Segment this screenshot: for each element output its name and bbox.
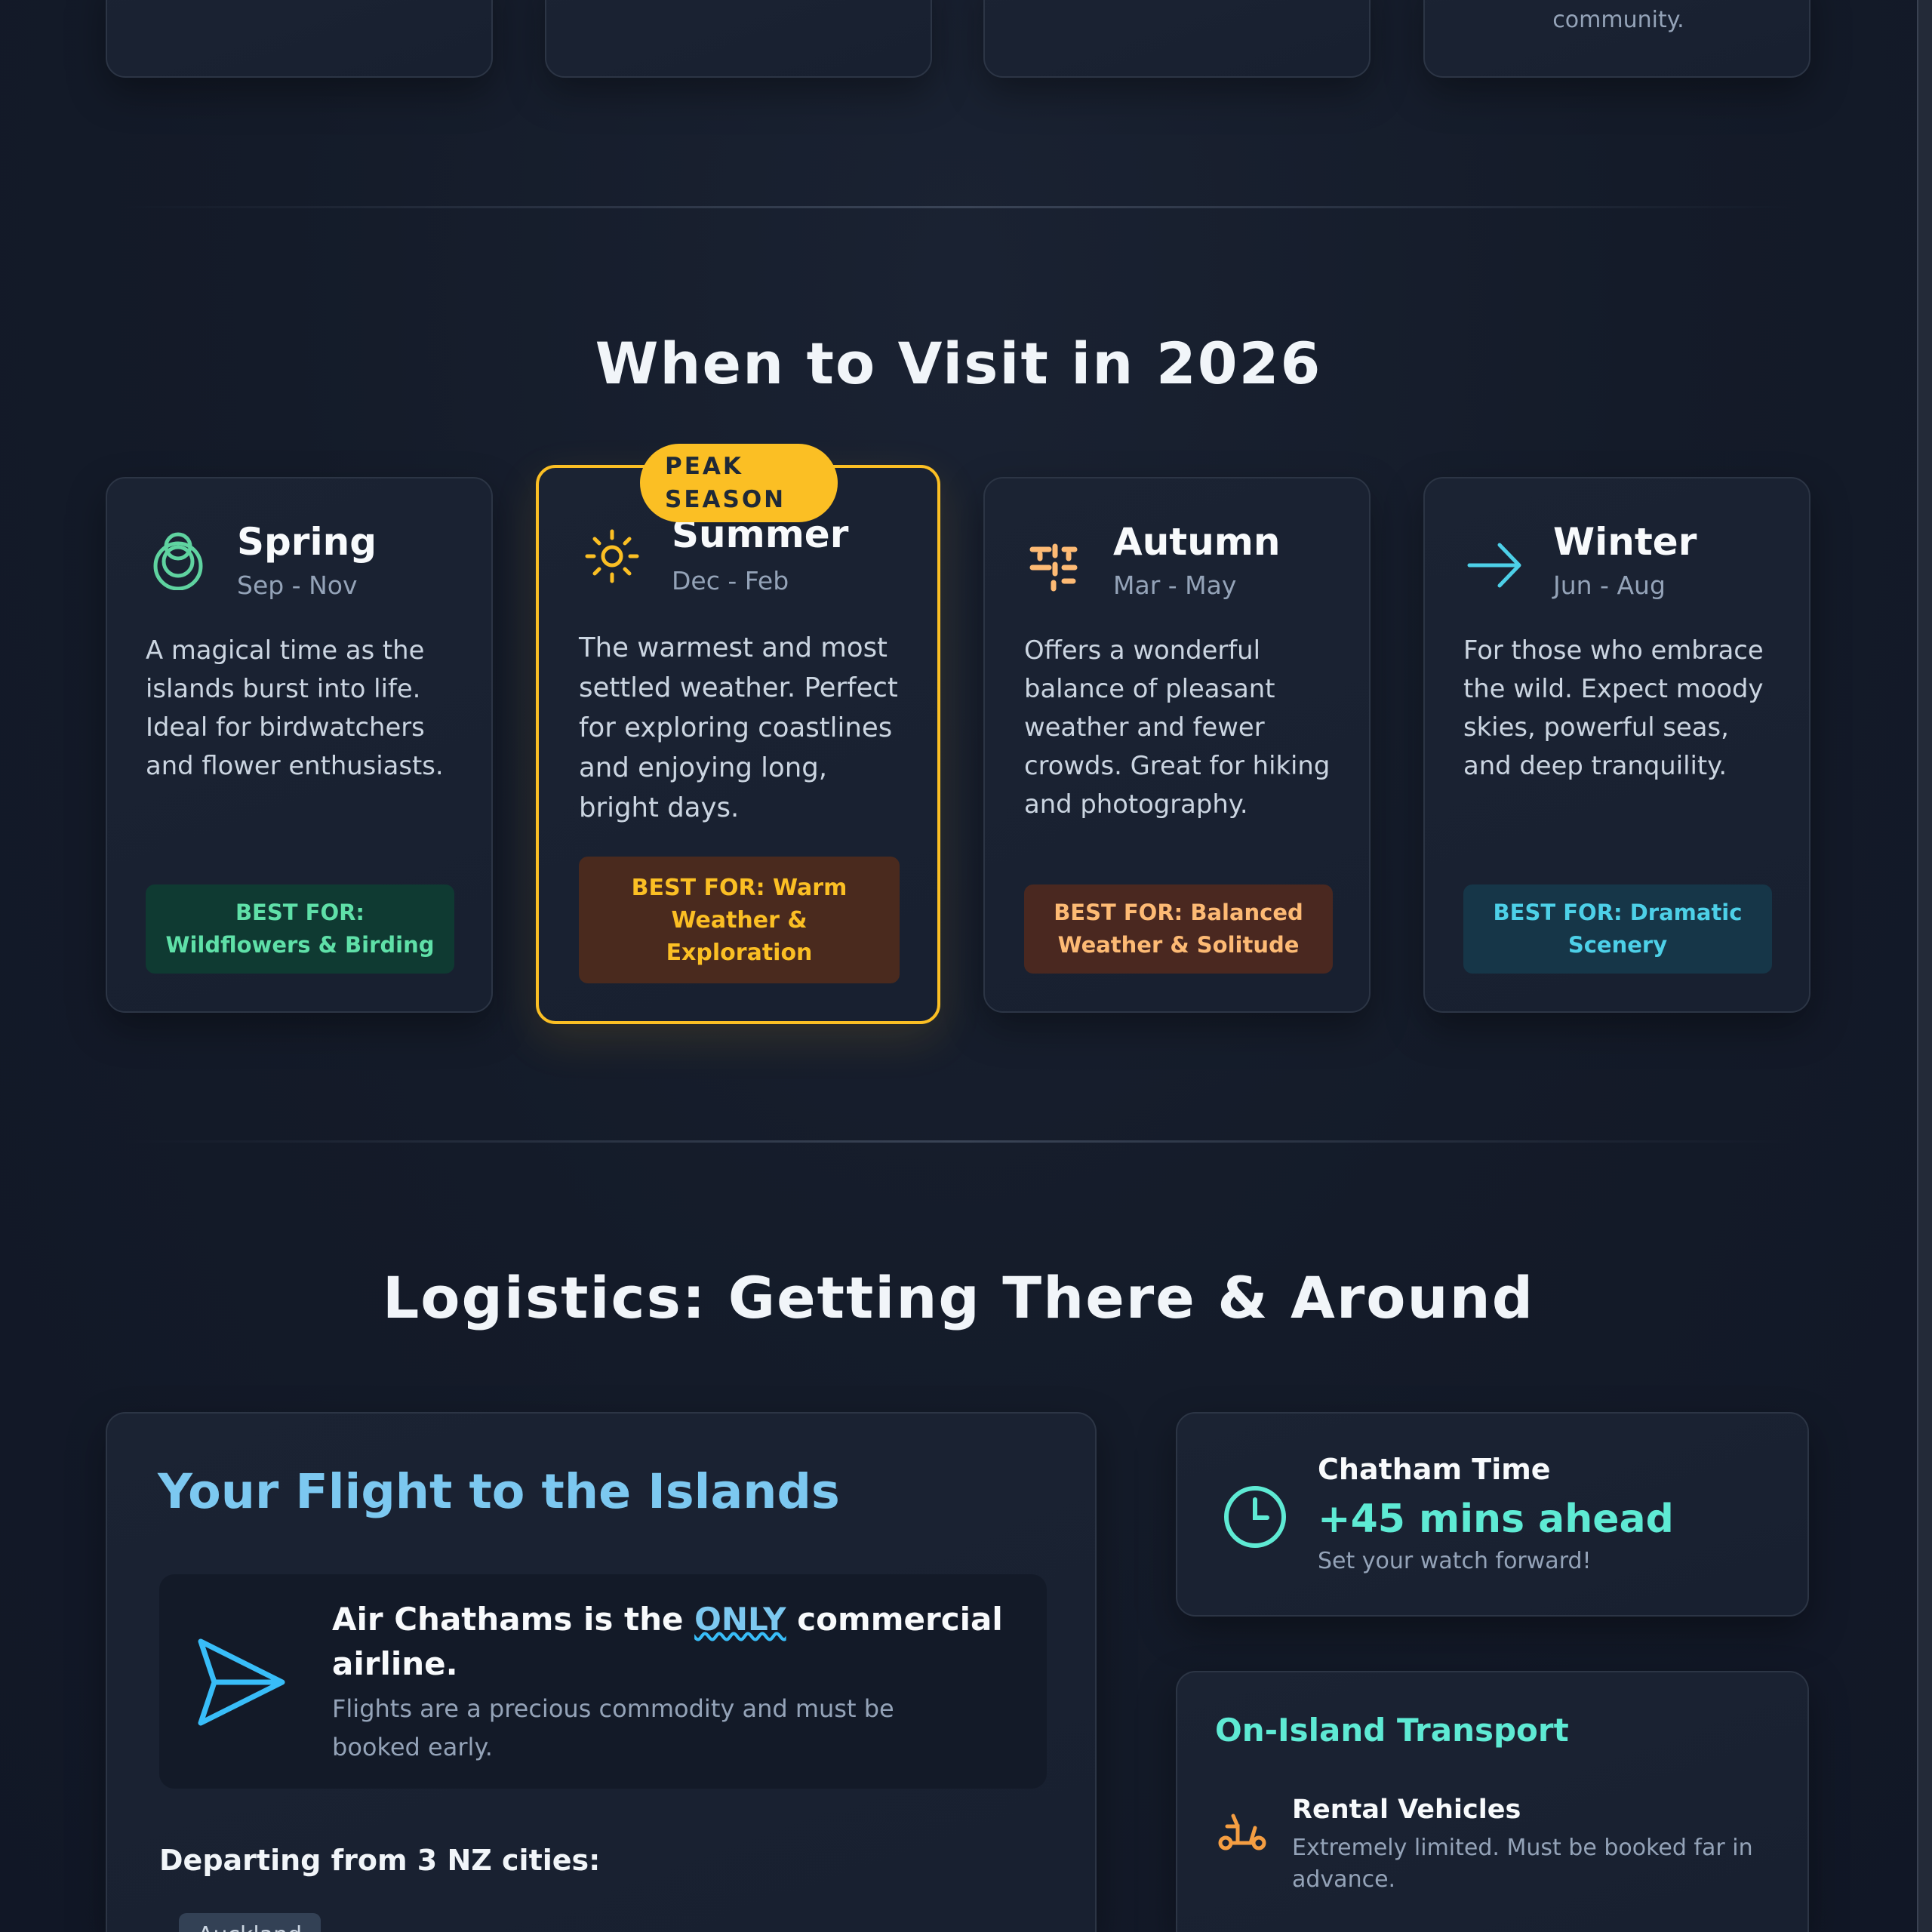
panel: winter	[1423, 477, 1810, 1013]
panel: chatham time	[1176, 1412, 1809, 1617]
icon: clock	[1224, 1486, 1286, 1548]
top cards row (cut off): community.	[1552, 7, 1684, 33]
chip: Auckland	[179, 1913, 321, 1932]
badge: winter	[1463, 884, 1772, 974]
icon: arrow	[1467, 543, 1521, 587]
badge: summer: Weather &	[671, 907, 808, 933]
panel: summer (peak): Dec - Feb	[672, 566, 789, 595]
badge: peak season	[640, 444, 838, 522]
panel: chatham time: +45 mins ahead	[1318, 1497, 1674, 1542]
badge: winter: Scenery	[1568, 932, 1667, 958]
panel: autumn: Mar - May	[1113, 571, 1236, 600]
panel: spring: A magical time as the islands burst into life. Ideal for birdwatchers and flower enthusiasts.	[146, 635, 444, 780]
departing text: Departing from 3 NZ cities:	[159, 1844, 600, 1877]
icon: spring	[154, 533, 202, 590]
panel: summer (peak): The warmest and most settled weather. Perfect for exploring coastlines and enjoying long, bright days.	[579, 632, 898, 823]
badge: peak season: PEAK	[665, 453, 743, 480]
badge: summer: BEST FOR: Warm	[632, 874, 847, 901]
flight title: Your Flight to the Islands	[158, 1463, 840, 1519]
panel: summer (peak): Summer	[672, 512, 848, 556]
panel: summer (peak)	[536, 465, 940, 1024]
badge: summer: Exploration	[666, 939, 812, 966]
icon: scooter	[1218, 1814, 1266, 1850]
panel: autumn: Autumn	[1113, 520, 1280, 564]
badge: spring: BEST FOR:	[235, 900, 365, 925]
callout: only airline: Flights are a precious commodity and must be booked early.	[332, 1694, 894, 1761]
panel: on-island transport	[1176, 1671, 1809, 1932]
callout: only airline	[159, 1574, 1047, 1789]
badge: autumn: Weather & Solitude	[1058, 932, 1299, 958]
badge: summer	[579, 857, 900, 983]
panel: spring	[106, 477, 493, 1013]
panel: autumn	[983, 477, 1371, 1013]
panel: winter: Jun - Aug	[1553, 571, 1666, 600]
badge: winter: BEST FOR: Dramatic	[1494, 900, 1742, 925]
icon: plane	[198, 1639, 285, 1725]
badge: autumn: BEST FOR: Balanced	[1054, 900, 1303, 925]
panel: on-island transport: Rental Vehicles	[1292, 1795, 1521, 1825]
heading: When to Visit: When to Visit in 2026	[595, 330, 1321, 397]
badge: autumn	[1024, 884, 1333, 974]
panel: spring: Sep - Nov	[237, 571, 358, 600]
icon: sun	[586, 530, 638, 583]
heading: Logistics: Logistics: Getting There & Around	[383, 1264, 1534, 1331]
callout: only airline: Air Chathams is the ONLY commercial airline.	[332, 1601, 1003, 1682]
panel: on-island transport: On-Island Transport	[1215, 1712, 1569, 1749]
top cards row (cut off)	[106, 0, 1810, 94]
badge: spring: Wildflowers & Birding	[165, 932, 435, 958]
panel: chatham time: Chatham Time	[1318, 1453, 1551, 1486]
icon: autumn	[1029, 543, 1078, 592]
badge: peak season: SEASON	[665, 486, 786, 513]
panel: flight	[106, 1412, 1097, 1932]
panel: chatham time: Set your watch forward!	[1318, 1548, 1592, 1574]
panel: on-island transport: Extremely limited. Must be booked far in advance.	[1292, 1835, 1753, 1893]
badge: spring	[146, 884, 454, 974]
panel: spring: Spring	[237, 520, 377, 564]
panel: winter: Winter	[1553, 520, 1697, 564]
panel: winter: For those who embrace the wild. Expect moody skies, powerful seas, and deep tranquility.	[1463, 635, 1764, 780]
panel: autumn: Offers a wonderful balance of pleasant weather and fewer crowds. Great for hiking and photography.	[1024, 635, 1330, 819]
